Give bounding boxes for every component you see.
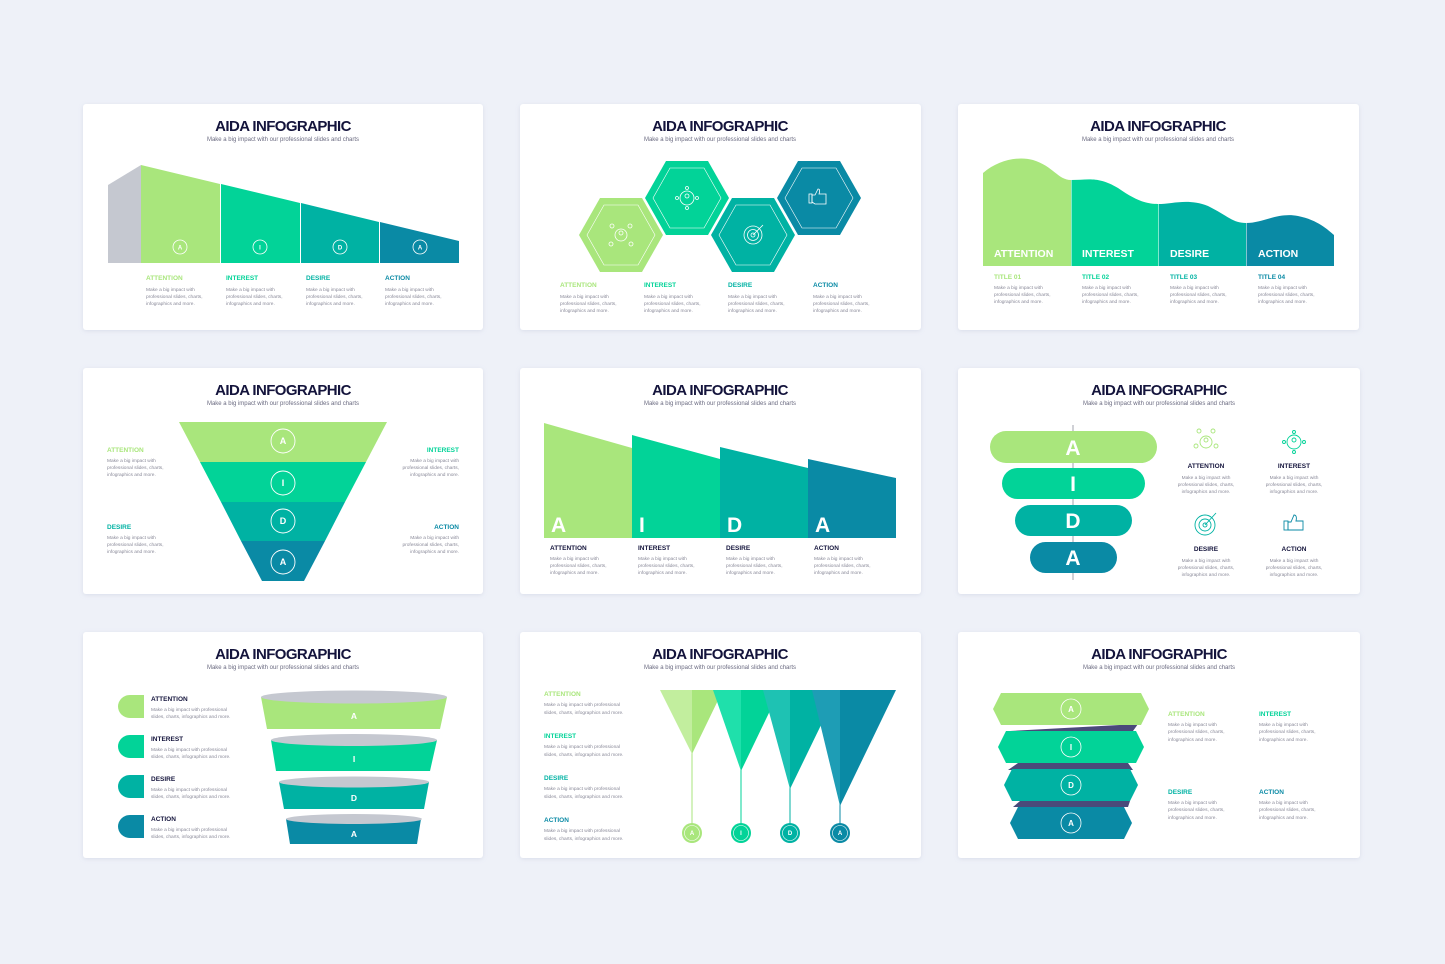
chart: stepped bars: A	[418, 246, 423, 252]
wave chart: ATTENTION	[994, 248, 1053, 260]
bar chart	[544, 423, 896, 538]
text blocks: DESIRE	[306, 275, 331, 282]
subtitle: Make a big impact with our professional slides and charts	[207, 665, 359, 671]
text blocks: ATTENTION	[560, 282, 597, 289]
text blocks: INTEREST	[544, 733, 576, 740]
text blocks: infographics and more.	[226, 301, 275, 307]
panel: 9 hex bars	[958, 632, 1360, 858]
text blocks: Make a big impact with	[146, 287, 195, 293]
title: AIDA INFOGRAPHIC	[1091, 646, 1228, 663]
panel: 3 wave	[958, 104, 1359, 330]
text blocks: ATTENTION	[1168, 711, 1205, 718]
text blocks: slides, charts, infographics and more.	[544, 710, 623, 716]
triangle chart: I	[740, 831, 742, 837]
chart: stepped bars: I	[259, 246, 261, 252]
text blocks: ATTENTION	[1188, 463, 1225, 470]
text blocks	[146, 275, 442, 307]
legend tabs: Make a big impact with professional	[151, 827, 227, 833]
text blocks: infographics and more.	[1170, 299, 1219, 305]
legend tabs: DESIRE	[151, 776, 176, 783]
legend tabs: slides, charts, infographics and more.	[151, 714, 230, 720]
text blocks: infographics and more.	[107, 472, 156, 478]
text blocks	[544, 691, 623, 842]
legend tabs: slides, charts, infographics and more.	[151, 834, 230, 840]
legend tabs: ATTENTION	[151, 696, 188, 703]
icons	[1194, 429, 1306, 535]
pill stack	[990, 425, 1157, 580]
text blocks: Make a big impact with	[1258, 285, 1307, 291]
text blocks: infographics and more.	[306, 301, 355, 307]
text blocks: professional slides, charts,	[1266, 482, 1322, 488]
subtitle: Make a big impact with our professional slides and charts	[644, 665, 796, 671]
bar chart: A	[551, 514, 566, 537]
subtitle: Make a big impact with our professional slides and charts	[644, 137, 796, 143]
bar chart: D	[727, 514, 742, 537]
text blocks: professional slides, charts,	[226, 294, 283, 300]
text blocks: Make a big impact with professional	[544, 702, 620, 708]
text blocks: slides, charts, infographics and more.	[544, 794, 623, 800]
legend tabs: Make a big impact with professional	[151, 787, 227, 793]
text blocks: Make a big impact with	[1259, 722, 1308, 728]
text blocks: Make a big impact with	[1170, 285, 1219, 291]
text blocks: ACTION	[1259, 789, 1284, 796]
text blocks: infographics and more.	[638, 570, 687, 576]
text blocks: infographics and more.	[1258, 299, 1307, 305]
text blocks: professional slides, charts,	[560, 301, 617, 307]
text blocks: infographics and more.	[560, 308, 609, 314]
funnel: I	[282, 478, 284, 488]
text blocks: professional slides, charts,	[1259, 729, 1316, 735]
text blocks	[1178, 463, 1322, 578]
hex bar stack: A	[1068, 705, 1074, 714]
text blocks: DESIRE	[107, 524, 132, 531]
cylinders: A	[351, 711, 357, 721]
text blocks: DESIRE	[1168, 789, 1193, 796]
funnel: A	[280, 557, 287, 567]
text blocks: professional slides, charts,	[550, 563, 607, 569]
hexagon chart	[579, 161, 861, 272]
text blocks: Make a big impact with professional	[544, 786, 620, 792]
text blocks: infographics and more.	[814, 570, 863, 576]
text blocks: DESIRE	[728, 282, 753, 289]
cylinders	[261, 690, 447, 844]
title: AIDA INFOGRAPHIC	[1090, 118, 1227, 135]
subtitle: Make a big impact with our professional slides and charts	[207, 137, 359, 143]
hex bar stack	[993, 693, 1149, 839]
text blocks: Make a big impact with	[813, 294, 862, 300]
funnel	[179, 422, 387, 581]
text blocks: Make a big impact with	[385, 287, 434, 293]
text blocks: INTEREST	[427, 447, 459, 454]
triangle chart: A	[838, 831, 843, 837]
text blocks: Make a big impact with	[226, 287, 275, 293]
text blocks: infographics and more.	[1270, 572, 1318, 578]
text blocks: ACTION	[434, 524, 459, 531]
text blocks: Make a big impact with	[1259, 800, 1308, 806]
text blocks: Make a big impact with	[410, 458, 459, 464]
text blocks: TITLE 02	[1082, 274, 1109, 281]
cylinders: I	[353, 754, 355, 764]
text blocks: professional slides, charts,	[644, 301, 701, 307]
cylinders: A	[351, 829, 357, 839]
text blocks: TITLE 01	[994, 274, 1021, 281]
text blocks: Make a big impact with	[1168, 722, 1217, 728]
text blocks: DESIRE	[544, 775, 569, 782]
text blocks: infographics and more.	[146, 301, 195, 307]
bar chart: A	[815, 514, 830, 537]
hex bar stack: A	[1068, 819, 1074, 828]
text blocks: Make a big impact with	[1168, 800, 1217, 806]
text blocks: TITLE 04	[1258, 274, 1285, 281]
legend tabs: INTEREST	[151, 736, 183, 743]
text blocks: INTEREST	[638, 545, 670, 552]
text blocks: infographics and more.	[1182, 572, 1230, 578]
text blocks: Make a big impact with	[306, 287, 355, 293]
subtitle: Make a big impact with our professional slides and charts	[1083, 665, 1235, 671]
text blocks: infographics and more.	[644, 308, 693, 314]
text blocks: infographics and more.	[550, 570, 599, 576]
text blocks: professional slides, charts,	[814, 563, 871, 569]
text blocks: INTEREST	[1259, 711, 1291, 718]
text blocks: infographics and more.	[1182, 489, 1230, 495]
hex bar stack: I	[1070, 743, 1072, 752]
panel: 6 pills and icons	[958, 368, 1360, 594]
text blocks: infographics and more.	[994, 299, 1043, 305]
funnel: D	[280, 516, 287, 526]
text blocks: professional slides, charts,	[385, 294, 442, 300]
text blocks: professional slides, charts,	[726, 563, 783, 569]
text blocks: ACTION	[813, 282, 838, 289]
text blocks: professional slides, charts,	[1258, 292, 1315, 298]
text blocks: professional slides, charts,	[1168, 807, 1225, 813]
text blocks: professional slides, charts,	[107, 542, 164, 548]
text blocks: Make a big impact with	[644, 294, 693, 300]
text blocks: ACTION	[385, 275, 410, 282]
triangle chart: D	[788, 831, 793, 837]
text blocks: ATTENTION	[107, 447, 144, 454]
text blocks	[560, 282, 870, 314]
triangle chart: A	[690, 831, 695, 837]
title: AIDA INFOGRAPHIC	[215, 382, 352, 399]
text blocks: DESIRE	[726, 545, 751, 552]
pill stack: A	[1065, 437, 1081, 460]
text blocks: Make a big impact with	[1182, 558, 1231, 564]
text blocks: professional slides, charts,	[813, 301, 870, 307]
text blocks: professional slides, charts,	[1178, 565, 1234, 571]
legend tabs: slides, charts, infographics and more.	[151, 794, 230, 800]
subtitle: Make a big impact with our professional slides and charts	[207, 401, 359, 407]
text blocks: ATTENTION	[146, 275, 183, 282]
bar chart: I	[639, 514, 645, 537]
text blocks	[107, 447, 459, 555]
text blocks	[1168, 711, 1316, 821]
text blocks: infographics and more.	[1259, 815, 1308, 821]
text blocks: Make a big impact with	[107, 535, 156, 541]
legend tabs: slides, charts, infographics and more.	[151, 754, 230, 760]
title: AIDA INFOGRAPHIC	[1091, 382, 1228, 399]
panel: 1 bar staircase	[83, 104, 483, 330]
text blocks	[994, 274, 1315, 305]
text blocks	[550, 545, 871, 576]
text blocks: professional slides, charts,	[107, 465, 164, 471]
panel: 8 inverted triangles	[520, 632, 921, 858]
text blocks: Make a big impact with	[560, 294, 609, 300]
text blocks: slides, charts, infographics and more.	[544, 752, 623, 758]
text blocks: professional slides, charts,	[994, 292, 1051, 298]
text blocks: professional slides, charts,	[1178, 482, 1234, 488]
text blocks: infographics and more.	[1259, 737, 1308, 743]
text blocks: professional slides, charts,	[402, 542, 459, 548]
wave chart: INTEREST	[1082, 248, 1135, 260]
triangle chart	[660, 690, 896, 843]
panel: 7 cylinder funnel	[83, 632, 483, 858]
text blocks: Make a big impact with	[638, 556, 687, 562]
text blocks: Make a big impact with	[994, 285, 1043, 291]
panel: 2 hexagons	[520, 104, 921, 330]
text blocks: professional slides, charts,	[1259, 807, 1316, 813]
text blocks: Make a big impact with	[1182, 475, 1231, 481]
pill stack: D	[1065, 510, 1081, 533]
legend tabs	[118, 695, 230, 840]
text blocks: professional slides, charts,	[1266, 565, 1322, 571]
hex bar stack: D	[1068, 781, 1074, 790]
text blocks: ACTION	[814, 545, 839, 552]
text blocks: INTEREST	[226, 275, 258, 282]
text blocks: Make a big impact with professional	[544, 744, 620, 750]
text blocks: professional slides, charts,	[1168, 729, 1225, 735]
pill stack: I	[1070, 473, 1076, 496]
text blocks: infographics and more.	[728, 308, 777, 314]
text blocks: INTEREST	[1278, 463, 1310, 470]
text blocks: ACTION	[1282, 546, 1307, 553]
text blocks: Make a big impact with	[550, 556, 599, 562]
icons	[609, 186, 826, 246]
text blocks: slides, charts, infographics and more.	[544, 836, 623, 842]
legend tabs: ACTION	[151, 816, 176, 823]
text blocks: infographics and more.	[1168, 815, 1217, 821]
chart: stepped bars: D	[338, 246, 343, 252]
text blocks: professional slides, charts,	[1170, 292, 1227, 298]
cylinders: D	[351, 793, 357, 803]
title: AIDA INFOGRAPHIC	[652, 382, 789, 399]
chart: stepped bars: A	[178, 246, 183, 252]
text blocks: infographics and more.	[107, 549, 156, 555]
title: AIDA INFOGRAPHIC	[215, 646, 352, 663]
text blocks: infographics and more.	[726, 570, 775, 576]
text blocks: infographics and more.	[410, 472, 459, 478]
text blocks: INTEREST	[644, 282, 676, 289]
text blocks: DESIRE	[1194, 546, 1219, 553]
wave chart: DESIRE	[1170, 248, 1209, 260]
wave chart	[983, 158, 1334, 266]
text blocks: professional slides, charts,	[1082, 292, 1139, 298]
subtitle: Make a big impact with our professional slides and charts	[1083, 401, 1235, 407]
text blocks: Make a big impact with	[1270, 558, 1319, 564]
text blocks: professional slides, charts,	[728, 301, 785, 307]
text blocks: infographics and more.	[1168, 737, 1217, 743]
legend tabs: Make a big impact with professional	[151, 707, 227, 713]
text blocks: professional slides, charts,	[638, 563, 695, 569]
text blocks: Make a big impact with	[1270, 475, 1319, 481]
text blocks: ATTENTION	[550, 545, 587, 552]
title: AIDA INFOGRAPHIC	[215, 118, 352, 135]
title: AIDA INFOGRAPHIC	[652, 646, 789, 663]
text blocks: infographics and more.	[385, 301, 434, 307]
text blocks: Make a big impact with	[410, 535, 459, 541]
text blocks: Make a big impact with	[1082, 285, 1131, 291]
legend tabs: Make a big impact with professional	[151, 747, 227, 753]
text blocks: Make a big impact with	[107, 458, 156, 464]
text blocks: ATTENTION	[544, 691, 581, 698]
text blocks: professional slides, charts,	[146, 294, 203, 300]
text blocks: ACTION	[544, 817, 569, 824]
wave chart: ACTION	[1258, 248, 1298, 260]
text blocks: professional slides, charts,	[402, 465, 459, 471]
text blocks: infographics and more.	[1082, 299, 1131, 305]
chart: stepped bars	[108, 165, 459, 263]
text blocks: infographics and more.	[410, 549, 459, 555]
text blocks: TITLE 03	[1170, 274, 1197, 281]
text blocks: Make a big impact with professional	[544, 828, 620, 834]
text blocks: professional slides, charts,	[306, 294, 363, 300]
text blocks: infographics and more.	[813, 308, 862, 314]
panel: 4 funnel triangle	[83, 368, 483, 594]
subtitle: Make a big impact with our professional slides and charts	[644, 401, 796, 407]
panel: 5 slanted bars	[520, 368, 921, 594]
text blocks: Make a big impact with	[726, 556, 775, 562]
title: AIDA INFOGRAPHIC	[652, 118, 789, 135]
text blocks: Make a big impact with	[728, 294, 777, 300]
subtitle: Make a big impact with our professional slides and charts	[1082, 137, 1234, 143]
funnel: A	[280, 436, 287, 446]
text blocks: Make a big impact with	[814, 556, 863, 562]
text blocks: infographics and more.	[1270, 489, 1318, 495]
pill stack: A	[1065, 547, 1081, 570]
